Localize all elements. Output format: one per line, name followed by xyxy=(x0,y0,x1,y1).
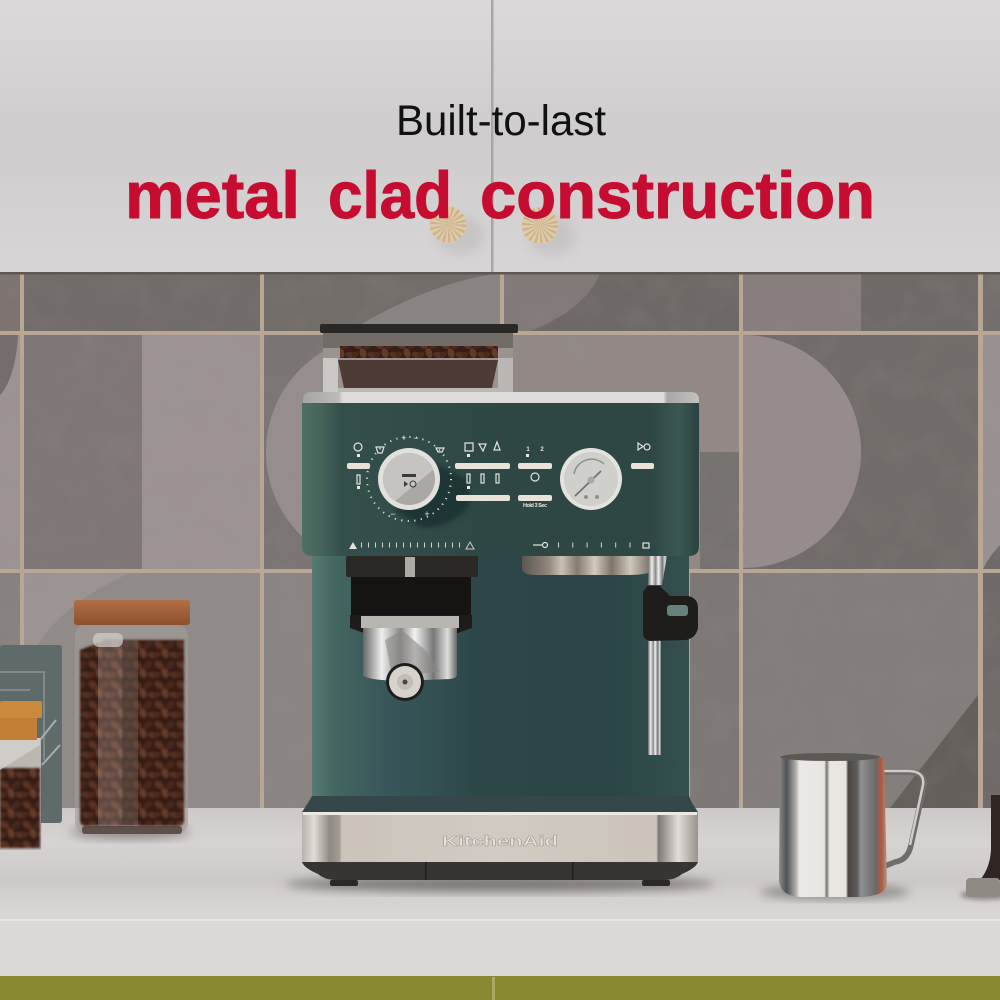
base foot xyxy=(302,862,698,886)
machine shadow on counter xyxy=(285,876,715,892)
steam ring xyxy=(522,556,654,575)
pressure gauge xyxy=(560,448,622,510)
counter xyxy=(0,808,1000,1000)
button labels xyxy=(523,447,547,509)
grind scale xyxy=(349,542,474,549)
cabinet knob left xyxy=(430,206,466,243)
brew group and portafilter xyxy=(346,556,478,701)
heading line 2 xyxy=(125,158,875,232)
steel base xyxy=(302,812,698,862)
button row xyxy=(347,463,654,501)
water level scale xyxy=(558,542,632,548)
dial shadow xyxy=(395,465,470,527)
brand emboss: KitchenAid xyxy=(442,833,558,850)
grind dial: + xyxy=(424,509,430,519)
bean hopper xyxy=(320,324,518,392)
tiled backsplash xyxy=(0,273,1000,810)
button labels: Hold 3 Sec xyxy=(523,503,547,509)
heading line 2: clad xyxy=(328,158,452,232)
grind dial: + xyxy=(401,433,407,443)
slate board xyxy=(0,645,62,823)
glass jar of coffee beans xyxy=(70,600,190,839)
portafilter knob xyxy=(386,663,424,701)
control icons xyxy=(354,442,650,548)
heading line 1: Built-to-last xyxy=(396,97,606,145)
machine head panel xyxy=(302,403,699,556)
drip tray top xyxy=(302,796,698,812)
pitcher body xyxy=(779,755,887,897)
button labels: 2 xyxy=(540,447,544,453)
heading line 2: construction xyxy=(480,158,875,232)
heading line 2: metal xyxy=(125,158,300,232)
coffee machine xyxy=(285,324,715,892)
grind dial xyxy=(367,433,451,521)
tamper xyxy=(960,795,1000,900)
pitcher handle xyxy=(880,772,924,868)
cabinet knob right xyxy=(522,207,558,244)
small jar of coffee beans xyxy=(0,701,42,850)
steel top edge highlight xyxy=(303,812,697,815)
grind dial: − xyxy=(390,509,396,519)
milk pitcher xyxy=(760,753,924,899)
grind dial: − xyxy=(413,433,419,443)
steam wand xyxy=(643,556,698,755)
indicator lights xyxy=(357,454,529,489)
upper cabinets xyxy=(0,0,1000,274)
machine body xyxy=(312,552,689,797)
button labels: 1 xyxy=(526,447,530,453)
top steel trim xyxy=(303,392,699,403)
